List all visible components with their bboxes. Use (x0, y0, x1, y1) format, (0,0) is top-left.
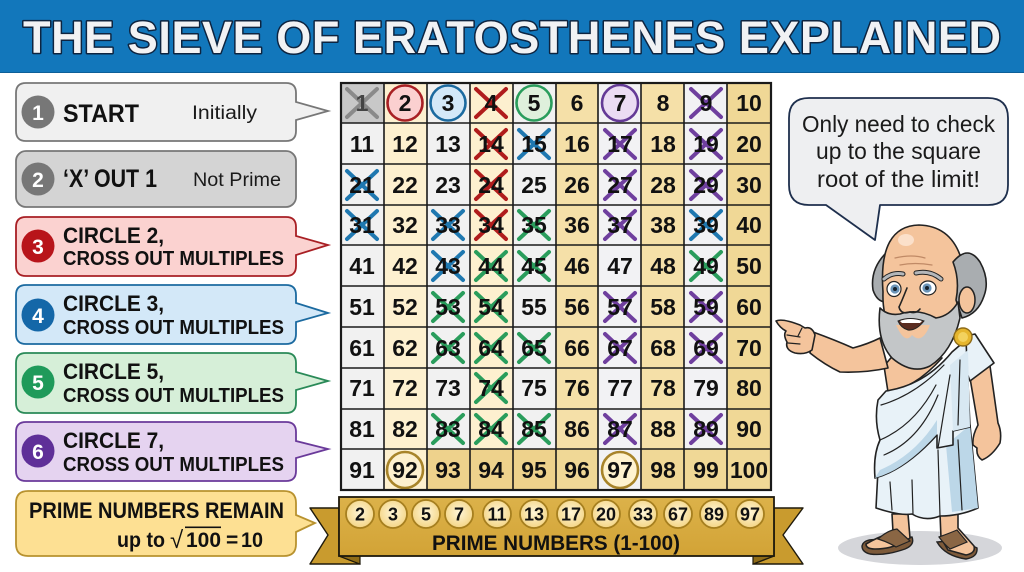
grid numbers 1 to 100: 3 (442, 90, 454, 116)
grid numbers 1 to 100: 42 (392, 253, 418, 279)
prime number values: 3 (388, 504, 398, 524)
sleeve and draped robe (875, 334, 994, 478)
circled numbers (387, 85, 638, 488)
prime number values: 7 (454, 504, 464, 524)
grid numbers 1 to 100: 67 (607, 335, 633, 361)
grid numbers 1 to 100: 63 (435, 335, 461, 361)
torso skin (884, 352, 942, 392)
grid numbers 1 to 100: 70 (736, 335, 762, 361)
grid numbers 1 to 100: 64 (478, 335, 504, 361)
grid numbers 1 to 100: 53 (435, 294, 461, 320)
speech bubble: up to the square (816, 138, 981, 164)
grid numbers 1 to 100: 9 (700, 90, 712, 116)
panel: step 1 start: START (63, 100, 139, 128)
grid numbers 1 to 100: 78 (650, 375, 676, 401)
grid numbers 1 to 100: 28 (650, 172, 676, 198)
panel: step 2 x out 1: ‘X’ OUT 1 (63, 165, 157, 193)
grid numbers 1 to 100: 98 (650, 457, 676, 483)
panel: step 6 circle 7: 6 (32, 441, 44, 464)
speech bubble (789, 98, 1008, 240)
grid numbers 1 to 100: 93 (435, 457, 461, 483)
grid numbers 1 to 100: 59 (693, 294, 719, 320)
grid numbers 1 to 100: 58 (650, 294, 676, 320)
grid numbers 1 to 100: 76 (564, 375, 590, 401)
grid numbers 1 to 100: 10 (736, 90, 762, 116)
grid numbers 1 to 100: 77 (607, 375, 633, 401)
number grid (341, 83, 771, 490)
grid numbers 1 to 100: 88 (650, 416, 676, 442)
panel: prime numbers remain note: PRIME NUMBERS REMAIN (29, 498, 284, 523)
speech bubble: root of the limit! (817, 166, 980, 192)
grid numbers 1 to 100: 34 (478, 212, 504, 238)
panel: step 4 circle 3 (16, 285, 328, 344)
grid numbers 1 to 100: 15 (521, 131, 547, 157)
prime number values: 20 (596, 504, 616, 524)
ribbon caption: PRIME NUMBERS (1-100) (432, 532, 680, 555)
grid numbers 1 to 100: 45 (521, 253, 547, 279)
grid numbers 1 to 100: 17 (607, 131, 633, 157)
prime number values: 33 (633, 504, 653, 524)
grid numbers 1 to 100: 54 (478, 294, 504, 320)
panel: step 5 circle 5: CIRCLE 5, (63, 359, 164, 384)
grid numbers 1 to 100: 73 (435, 375, 461, 401)
grid numbers 1 to 100: 80 (736, 375, 762, 401)
cross marks (347, 89, 721, 443)
grid numbers 1 to 100: 8 (657, 90, 670, 116)
panel: step 4 circle 3: CIRCLE 3, (63, 291, 164, 316)
tunic skirt (876, 420, 978, 519)
prime number values: 13 (524, 504, 544, 524)
grid numbers 1 to 100: 47 (607, 253, 633, 279)
bald head (882, 225, 964, 335)
grid numbers 1 to 100: 95 (521, 457, 547, 483)
grid numbers 1 to 100: 2 (399, 90, 411, 116)
grid numbers 1 to 100: 62 (392, 335, 418, 361)
ear (959, 287, 975, 313)
grid numbers 1 to 100: 87 (607, 416, 633, 442)
grid numbers 1 to 100: 83 (435, 416, 461, 442)
grid numbers 1 to 100: 91 (349, 457, 375, 483)
left side hair (872, 254, 886, 302)
panel: step 1 start: Initially (192, 103, 258, 124)
grid numbers 1 to 100: 56 (564, 294, 590, 320)
prime number values: 5 (421, 504, 431, 524)
grid numbers 1 to 100: 75 (521, 375, 547, 401)
panel: step 5 circle 5: 5 (32, 372, 44, 395)
grid numbers 1 to 100: 26 (564, 172, 590, 198)
grid numbers 1 to 100: 84 (478, 416, 504, 442)
left arm and hand (970, 366, 1001, 460)
side hair (953, 253, 986, 318)
ground shadow (838, 531, 1002, 565)
grid numbers 1 to 100: 19 (693, 131, 719, 157)
pointing arm and hand (776, 320, 888, 372)
grid numbers 1 to 100: 86 (564, 416, 590, 442)
prime number values (355, 504, 760, 524)
grid numbers 1 to 100: 94 (478, 457, 504, 483)
panel: step 3 circle 2: 3 (32, 236, 44, 259)
grid numbers 1 to 100: 24 (478, 172, 504, 198)
grid numbers 1 to 100: 20 (736, 131, 762, 157)
title banner: THE SIEVE OF ERATOSTHENES EXPLAINED (23, 12, 1001, 63)
panel: step 3 circle 2 (16, 217, 328, 276)
grid numbers 1 to 100: 11 (350, 131, 374, 157)
grid numbers 1 to 100: 82 (392, 416, 418, 442)
grid numbers 1 to 100: 14 (478, 131, 504, 157)
grid numbers 1 to 100: 37 (607, 212, 633, 238)
grid numbers 1 to 100: 6 (571, 90, 583, 116)
grid numbers 1 to 100: 29 (693, 172, 719, 198)
eyes (887, 281, 936, 296)
panel: prime numbers remain note: 100 (186, 529, 221, 552)
grid numbers 1 to 100: 79 (693, 375, 719, 401)
grid numbers 1 to 100: 5 (528, 90, 541, 116)
panel: step 6 circle 7: CIRCLE 7, (63, 428, 164, 453)
legs and sandals (862, 514, 977, 559)
grid numbers 1 to 100: 90 (736, 416, 762, 442)
grid numbers 1 to 100: 92 (392, 457, 418, 483)
prime number values: 97 (740, 504, 760, 524)
grid numbers 1 to 100: 7 (614, 90, 626, 116)
panel: step 2 x out 1 (16, 151, 296, 207)
eyebrows (884, 272, 941, 279)
prime number values: 17 (561, 504, 581, 524)
grid numbers 1 to 100 (349, 90, 768, 483)
panel: step 3 circle 2: CIRCLE 2, (63, 223, 164, 248)
grid numbers 1 to 100: 81 (349, 416, 375, 442)
grid numbers 1 to 100: 1 (356, 90, 369, 116)
grid numbers 1 to 100: 35 (521, 212, 547, 238)
grid numbers 1 to 100: 85 (521, 416, 547, 442)
grid numbers 1 to 100: 30 (736, 172, 762, 198)
grid numbers 1 to 100: 39 (693, 212, 719, 238)
grid numbers 1 to 100: 69 (693, 335, 719, 361)
panel: step 6 circle 7 (16, 422, 328, 481)
grid numbers 1 to 100: 49 (693, 253, 719, 279)
grid numbers 1 to 100: 57 (607, 294, 633, 320)
grid numbers 1 to 100: 89 (693, 416, 719, 442)
panel: step 6 circle 7: CROSS OUT MULTIPLES (63, 453, 284, 476)
panel: step 3 circle 2: CROSS OUT MULTIPLES (63, 247, 284, 270)
panel: prime numbers remain note: √ (170, 527, 184, 554)
grid numbers 1 to 100: 52 (392, 294, 418, 320)
prime number values: 67 (668, 504, 688, 524)
beard (879, 302, 960, 369)
prime number values: 89 (704, 504, 724, 524)
ribbon tails (310, 508, 803, 564)
panel: step 4 circle 3: 4 (32, 305, 44, 328)
grid numbers 1 to 100: 43 (435, 253, 461, 279)
panel: step 4 circle 3: CROSS OUT MULTIPLES (63, 316, 284, 339)
grid numbers 1 to 100: 51 (349, 294, 375, 320)
grid numbers 1 to 100: 97 (607, 457, 633, 483)
panel: prime numbers remain note: up to (117, 529, 165, 552)
grid numbers 1 to 100: 74 (478, 375, 504, 401)
panel: prime numbers remain note (16, 491, 315, 556)
grid numbers 1 to 100: 27 (607, 172, 633, 198)
grid numbers 1 to 100: 48 (650, 253, 676, 279)
grid numbers 1 to 100: 71 (349, 375, 375, 401)
grid numbers 1 to 100: 31 (349, 212, 375, 238)
panel: step 1 start: 1 (32, 102, 44, 125)
grid numbers 1 to 100: 13 (435, 131, 461, 157)
grid numbers 1 to 100: 12 (392, 131, 418, 157)
grid numbers 1 to 100: 60 (736, 294, 762, 320)
speech bubble: Only need to check (802, 111, 995, 137)
grid numbers 1 to 100: 40 (736, 212, 762, 238)
grid numbers 1 to 100: 36 (564, 212, 590, 238)
grid numbers 1 to 100: 21 (349, 172, 375, 198)
grid numbers 1 to 100: 16 (564, 131, 590, 157)
grid numbers 1 to 100: 23 (435, 172, 461, 198)
grid numbers 1 to 100: 33 (435, 212, 461, 238)
grid numbers 1 to 100: 66 (564, 335, 590, 361)
mouth (896, 318, 930, 338)
panel: step 5 circle 5 (16, 353, 328, 413)
grid numbers 1 to 100: 61 (349, 335, 375, 361)
panel: step 2 x out 1: 2 (32, 169, 44, 192)
panel: prime numbers remain note: = (226, 529, 238, 552)
ribbon body (339, 497, 774, 556)
grid numbers 1 to 100: 96 (564, 457, 590, 483)
prime number coins (346, 500, 764, 528)
grid cell fills (341, 83, 771, 490)
grid numbers 1 to 100: 44 (478, 253, 504, 279)
grid numbers 1 to 100: 72 (392, 375, 418, 401)
gold shoulder clasp (954, 328, 972, 346)
grid numbers 1 to 100: 50 (736, 253, 762, 279)
prime number values: 11 (487, 504, 507, 524)
illustration: Eratosthenes pointing (776, 225, 1002, 565)
grid numbers 1 to 100: 65 (521, 335, 547, 361)
grid numbers 1 to 100: 25 (521, 172, 547, 198)
grid numbers 1 to 100: 99 (693, 457, 719, 483)
panel: step 1 start (16, 83, 328, 141)
panel: step 2 x out 1: Not Prime (193, 170, 281, 191)
grid numbers 1 to 100: 68 (650, 335, 676, 361)
grid numbers 1 to 100: 41 (349, 253, 375, 279)
grid numbers 1 to 100: 22 (392, 172, 418, 198)
grid numbers 1 to 100: 100 (730, 457, 768, 483)
title banner (0, 0, 1024, 73)
prime number values: 2 (355, 504, 365, 524)
panel: step 5 circle 5: CROSS OUT MULTIPLES (63, 384, 284, 407)
grid numbers 1 to 100: 55 (521, 294, 547, 320)
prime numbers ribbon (310, 497, 803, 564)
grid numbers 1 to 100: 18 (650, 131, 676, 157)
panel: prime numbers remain note: 10 (241, 529, 263, 552)
nose (899, 288, 920, 313)
grid numbers 1 to 100: 4 (485, 90, 498, 116)
grid numbers 1 to 100: 46 (564, 253, 590, 279)
grid numbers 1 to 100: 32 (392, 212, 418, 238)
grid numbers 1 to 100: 38 (650, 212, 676, 238)
